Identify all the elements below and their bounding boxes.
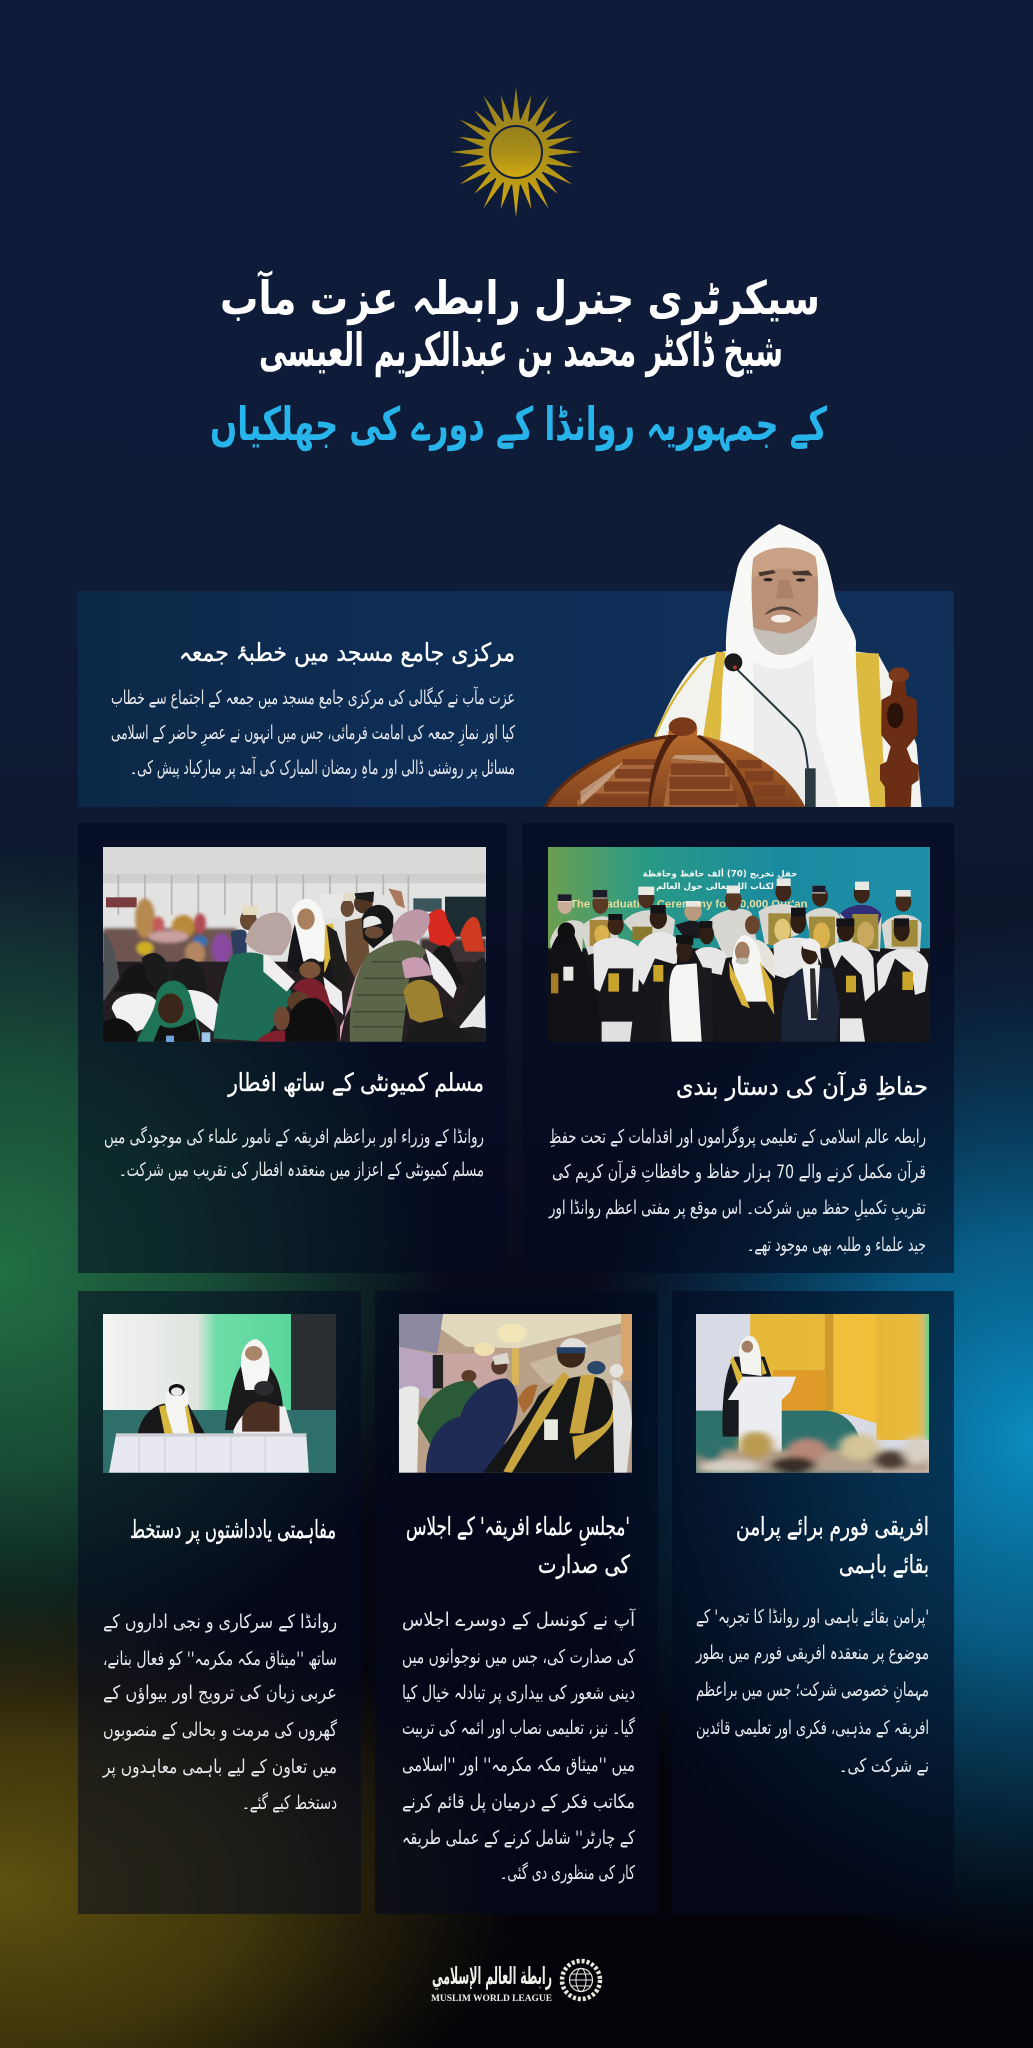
iftar text block: روانڈا کے وزراء اور براعظم افریقہ کے نامور علماء کی موجودگی میں [104,1125,484,1148]
signing text block: روانڈا کے سرکاری و نجی اداروں کے [103,1611,337,1633]
panel: signing memoranda [78,1291,361,1914]
banner background [78,591,954,807]
banner text block: مسائل پر روشنی ڈالی اور ماہِ رمضان المبارک کی آمد پر مبارکباد پیش کی۔ [130,755,515,779]
panel background [78,823,507,1273]
panel: Iftar with Muslim community [78,823,507,1273]
iftar text block [104,1125,484,1181]
graduation text block: جید علماء و طلبہ بھی موجود تھے۔ [747,1234,926,1256]
council heading [406,1512,630,1579]
council heading: کی صدارت [538,1550,630,1579]
photo: graduates group: The Graduation Ceremony for 70,000 Qur'an [570,898,808,910]
panel: Quran memorisers graduation [522,823,954,1273]
graduation text block [548,1125,926,1256]
banner text block [111,685,516,779]
banner text block: کیا اور نمازِ جمعہ کی امامت فرمائی، جس میں انہوں نے عصرِ حاضر کے اسلامی [111,722,516,747]
forum text block: افریقہ کے مذہبی، فکری اور تعلیمی قائدین [696,1717,929,1739]
photo: signing ceremony [103,1314,337,1473]
iftar heading: مسلم کمیونٹی کے ساتھ افطار [226,1068,484,1098]
logo: Muslim World League: رابطة العالم الإسلامي [432,1962,552,1990]
panel background [78,1291,361,1914]
signing text block [102,1611,338,1814]
forum text block: 'پرامن بقائے باہمی اور روانڈا کا تجربہ' کے [696,1606,929,1628]
icon: golden sun [452,88,580,217]
photo: seated delegates [399,1314,633,1473]
iftar text block: مسلم کمیونٹی کے اعزاز میں منعقدہ افطار کی تقریب میں شرکت۔ [119,1159,484,1181]
signing text block: میں تعاون کے لیے باہمی معاہدوں پر [102,1756,337,1778]
panel: African forum for peaceful coexistence [672,1291,954,1914]
photo: iftar crowd [100,845,490,1045]
forum text block: نے شرکت کی۔ [839,1755,929,1777]
photo: graduates group: لكتاب الله تعالى حول العالم [656,882,774,892]
forum heading: افریقی فورم برائے پرامن [736,1512,929,1541]
forum text block: مہمانِ خصوصی شرکت؛ جس میں براعظم [696,1679,929,1703]
council text block: دینی شعور کی بیداری پر تبادلہ خیال کیا [402,1682,635,1704]
signing text block: دستخط کیے گئے۔ [242,1791,337,1814]
title [210,270,827,452]
photo: speaker at lectern [545,524,922,808]
panel: Friday sermon banner [78,524,954,808]
title: سیکرٹری جنرل رابطہ عزت مآب [220,270,820,325]
banner heading: مرکزی جامع مسجد میں خطبۂ جمعہ [179,638,515,668]
signing text block: عربی زبان کی ترویج اور بیواؤں کے [103,1682,337,1704]
council text block: گیا۔ نیز، تعلیمی نصاب اور ائمہ کی تربیت [402,1716,636,1739]
signing text block: گھروں کی مرمت و بحالی کے منصوبوں [103,1718,338,1741]
forum text block: موضوع پر منعقدہ افریقی فورم میں بطور [695,1642,929,1664]
photo: graduates group [545,845,935,1045]
panel: Council of African scholars [375,1291,658,1914]
council heading: 'مجلسِ علماء افریقہ' کے اجلاس [406,1512,630,1546]
council text block: مکاتب فکر کے درمیان پل قائم کرنے [402,1791,635,1813]
council text block: کار کی منظوری دی گئی۔ [500,1861,636,1884]
photo: graduates group: حفل تخريج (70) ألف حافظ وحافظة [643,868,797,880]
signing text block: ساتھ ''میثاق مکہ مکرمہ'' کو فعال بنانے، [103,1648,337,1670]
council text block: میں ''میثاق مکہ مکرمہ'' اور ''اسلامی [402,1754,635,1776]
graduation text block: قرآن مکمل کرنے والے 70 ہزار حفاظ و حافظاتِ قرآن کریم کی [552,1159,926,1183]
forum heading [736,1512,929,1579]
council text block: کی صدارت کی، جس میں نوجوانوں میں [402,1646,636,1668]
panel background [672,1291,954,1914]
council text block: آپ نے کونسل کے دوسرے اجلاس [402,1607,636,1631]
logo: Muslim World League [431,1961,600,2004]
forum heading: بقائے باہمی [839,1550,929,1579]
photo: speaker at podium [696,1314,931,1473]
signing heading: مفاہمتی یادداشتوں پر دستخط [130,1515,336,1544]
logo English wordmark: MUSLIM WORLD LEAGUE [431,1994,552,2004]
graduation heading: حفاظِ قرآن کی دستار بندی [676,1071,928,1101]
panel background [522,823,954,1273]
icon: globe and wreath [562,1961,600,1999]
council text block [402,1607,636,1884]
banner text block: عزت مآب نے کیگالی کی مرکزی جامع مسجد میں جمعہ کے اجتماع سے خطاب [111,685,515,709]
council text block: کے چارٹر'' شامل کرنے کے عملی طریقہ [402,1827,636,1849]
forum text block [695,1606,929,1777]
panel background [375,1291,658,1914]
